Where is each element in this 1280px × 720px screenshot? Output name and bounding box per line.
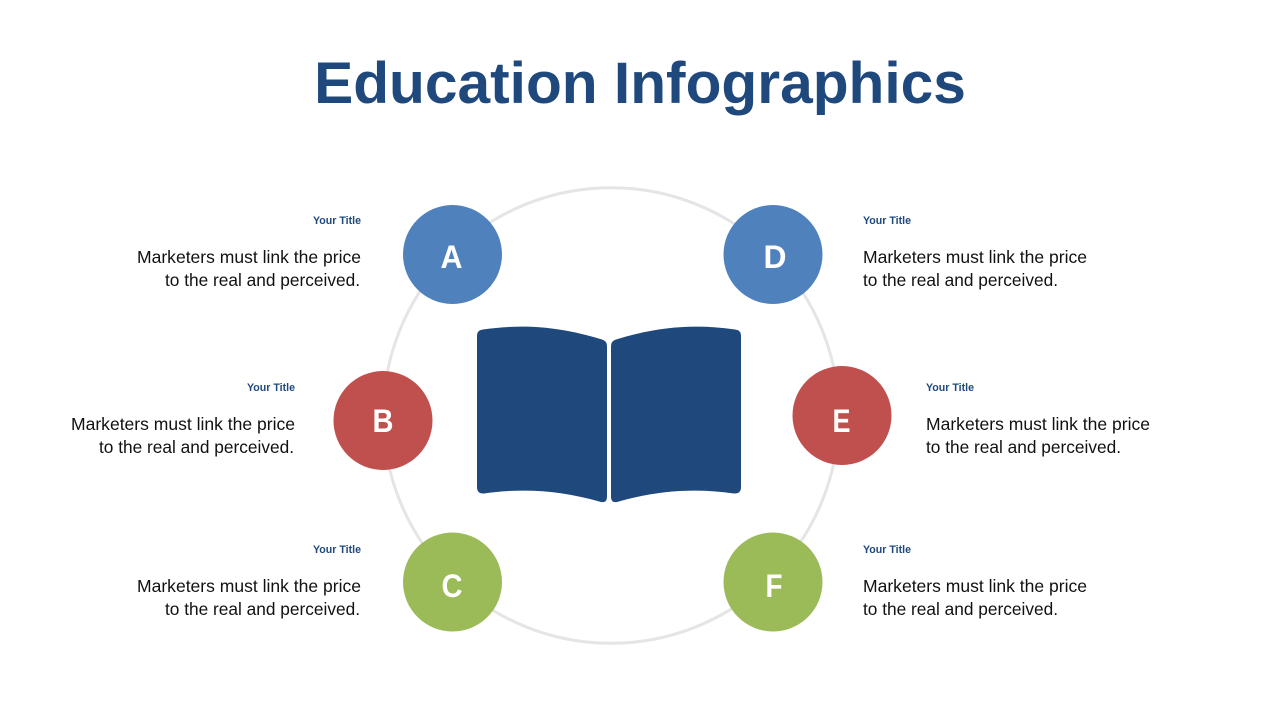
title: Education Infographics	[314, 51, 966, 116]
item A	[137, 205, 502, 304]
text B: Marketers must link the price	[71, 414, 295, 434]
item F	[724, 532, 1087, 632]
letter B: B	[372, 403, 394, 439]
heading F: Your Title	[863, 544, 911, 556]
heading A: Your Title	[313, 215, 361, 227]
circle D	[724, 205, 822, 304]
text F: Marketers must link the price	[863, 576, 1087, 596]
item C	[137, 532, 502, 632]
heading B: Your Title	[247, 382, 295, 394]
heading C: Your Title	[313, 544, 361, 556]
text F: to the real and perceived.	[863, 599, 1058, 619]
letter D: D	[764, 239, 786, 275]
letter E: E	[832, 403, 850, 439]
letter C: C	[442, 568, 462, 604]
text C: Marketers must link the price	[137, 576, 361, 596]
text D: to the real and perceived.	[863, 270, 1058, 290]
circle B	[334, 371, 432, 470]
circle A	[403, 205, 502, 304]
letter F: F	[766, 568, 782, 604]
heading E: Your Title	[926, 382, 974, 394]
circle F	[724, 532, 822, 632]
icon: open book	[477, 327, 741, 502]
item D	[724, 205, 1087, 304]
ring connecting the circles	[383, 188, 839, 643]
icon: right page	[611, 327, 741, 502]
text A: to the real and perceived.	[165, 270, 360, 290]
text D: Marketers must link the price	[863, 247, 1087, 267]
text C: to the real and perceived.	[165, 599, 360, 619]
text A: Marketers must link the price	[137, 247, 361, 267]
text B: to the real and perceived.	[99, 437, 294, 457]
circle E	[792, 366, 892, 465]
text E: to the real and perceived.	[926, 437, 1121, 457]
icon: left page	[477, 327, 607, 502]
item E	[792, 366, 1150, 465]
item B	[71, 371, 432, 470]
letter A: A	[440, 239, 462, 275]
text E: Marketers must link the price	[926, 414, 1150, 434]
circle C	[403, 532, 502, 632]
heading D: Your Title	[863, 215, 911, 227]
